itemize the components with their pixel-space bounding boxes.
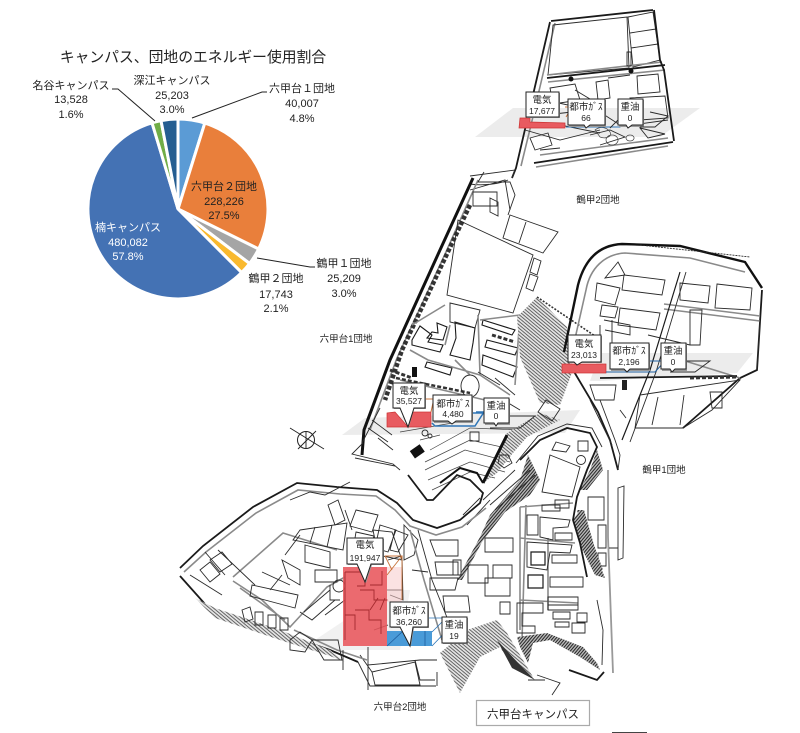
callout: 六甲台2団地 電気: 191,947	[350, 553, 381, 563]
pie label: 六甲台2団地: 六甲台２団地	[191, 181, 257, 193]
pie label: 鶴甲2団地: 鶴甲２団地	[248, 273, 304, 285]
callout: 六甲台1団地 電気: 電気	[399, 385, 419, 397]
map: eastern academic block	[440, 470, 624, 695]
map: 六甲台1団地 site plan	[352, 172, 558, 490]
pie label: 深江キャンパス: 3.0%	[159, 104, 185, 116]
site label: 六甲台1団地: 六甲台1団地	[320, 333, 373, 345]
callout: 六甲台1団地 都市ガス: 都市ｶﾞｽ	[436, 398, 470, 410]
usage band: 鶴甲2団地 電気	[519, 107, 628, 128]
title: キャンパス、団地のエネルギー使用割合	[60, 49, 326, 66]
usage band: 鶴甲1団地 電気	[562, 364, 606, 373]
pie label: 名谷キャンパス: 1.6%	[58, 109, 84, 121]
callout: 鶴甲2団地 都市ガス: 都市ｶﾞｽ	[569, 101, 603, 113]
pie label: 六甲台2団地: 27.5%	[208, 210, 240, 222]
callout: 六甲台1団地 重油: 0	[494, 411, 499, 421]
site label: 六甲台2団地: 六甲台2団地	[374, 701, 427, 713]
callout: 六甲台2団地 重油: 19	[449, 631, 459, 641]
callout: 鶴甲1団地 電気: 電気	[574, 338, 594, 350]
pie label: 鶴甲1団地: 25,209	[327, 273, 361, 285]
pie chart: energy share	[88, 119, 268, 299]
callout: 鶴甲2団地 電気: 電気	[532, 94, 552, 106]
callout: 鶴甲1団地 電気: 23,013	[571, 350, 597, 360]
callout: 鶴甲2団地 重油: 0	[628, 113, 633, 123]
callout: 六甲台1団地 重油	[484, 398, 535, 428]
map: 鶴甲2団地 site plan	[470, 10, 674, 210]
usage block: 六甲台2団地 電気	[343, 556, 402, 646]
label box: 六甲台キャンパス	[476, 700, 590, 726]
pie leader lines	[112, 89, 315, 267]
pie label: 楠キャンパス: 480,082	[108, 237, 148, 249]
usage band: 六甲台1団地 都市ガス	[432, 412, 490, 426]
usage block: 六甲台2団地 都市ガス	[387, 631, 432, 646]
callout: 鶴甲1団地 重油	[661, 343, 710, 372]
callout: 鶴甲1団地 都市ガス: 都市ｶﾞｽ	[612, 345, 646, 357]
callout: 六甲台1団地 電気	[393, 383, 426, 427]
callout: 鶴甲1団地 重油: 0	[671, 357, 676, 367]
pie label: 楠キャンパス: 57.8%	[112, 251, 144, 263]
site label: 鶴甲2団地: 鶴甲2団地	[576, 194, 620, 206]
pie label: 鶴甲1団地: 鶴甲１団地	[316, 258, 372, 270]
callout: 六甲台2団地 重油	[442, 617, 468, 644]
usage band: 六甲台1団地 電気	[387, 398, 434, 427]
callout: 鶴甲2団地 都市ガス: 66	[581, 113, 591, 123]
label box: 六甲台キャンパス: 六甲台キャンパス	[487, 707, 579, 721]
callout: 鶴甲2団地 重油: 重油	[620, 101, 640, 113]
pie label: 六甲台2団地: 228,226	[204, 196, 244, 208]
callout: 鶴甲2団地 重油	[610, 99, 668, 128]
callout: 鶴甲1団地 都市ガス: 2,196	[618, 357, 640, 367]
callout: 鶴甲2団地 電気	[526, 92, 560, 118]
callout: 六甲台2団地 重油: 重油	[444, 619, 464, 631]
pie label: 名谷キャンパス: 名谷キャンパス	[32, 80, 110, 92]
pie label: 深江キャンパス: 深江キャンパス	[134, 75, 210, 87]
pie label: 六甲台1団地: 六甲台１団地	[269, 83, 335, 95]
pie label: 六甲台1団地: 4.8%	[289, 113, 315, 125]
pie label: 深江キャンパス: 25,203	[155, 90, 189, 102]
map: 六甲台2団地 and main campus site plan	[180, 475, 486, 690]
site label: 鶴甲1団地: 鶴甲1団地	[642, 464, 686, 476]
pie label: 楠キャンパス: 楠キャンパス	[95, 222, 161, 234]
callout: 鶴甲1団地 都市ガス	[610, 343, 650, 372]
map: hillside contours	[440, 297, 618, 580]
pie label: 鶴甲1団地: 3.0%	[331, 288, 357, 300]
usage band: 六甲台2団地 重油	[428, 618, 452, 646]
gray ground planes	[300, 108, 753, 650]
callout: 六甲台2団地 都市ガス	[390, 602, 429, 646]
pie label: 鶴甲2団地: 17,743	[259, 289, 293, 301]
pie label: 鶴甲2団地: 2.1%	[263, 303, 289, 315]
usage band: 鶴甲1団地 都市ガス	[606, 361, 665, 372]
callout: 六甲台2団地 都市ガス: 都市ｶﾞｽ	[392, 605, 426, 617]
callout: 六甲台2団地 電気: 電気	[355, 539, 375, 551]
map: compass	[290, 428, 324, 449]
callout: 六甲台1団地 都市ガス	[433, 395, 473, 424]
callout: 鶴甲1団地 重油: 重油	[663, 345, 683, 357]
callout: 六甲台1団地 都市ガス: 4,480	[442, 409, 464, 419]
callout: 鶴甲2団地 電気: 17,677	[529, 106, 555, 116]
callout: 六甲台2団地 都市ガス: 36,260	[396, 617, 422, 627]
callout: 六甲台1団地 電気: 35,527	[396, 396, 422, 406]
pie label: 六甲台1団地: 40,007	[285, 98, 319, 110]
scale bar	[612, 732, 647, 733]
callout: 六甲台1団地 重油: 重油	[486, 400, 506, 412]
callout: 六甲台2団地 電気	[347, 538, 384, 583]
map: 鶴甲1団地 site plan	[564, 244, 762, 470]
callout: 鶴甲2団地 都市ガス	[568, 99, 606, 128]
callout: 鶴甲1団地 電気	[568, 335, 602, 365]
pie label: 名谷キャンパス: 13,528	[54, 94, 88, 106]
